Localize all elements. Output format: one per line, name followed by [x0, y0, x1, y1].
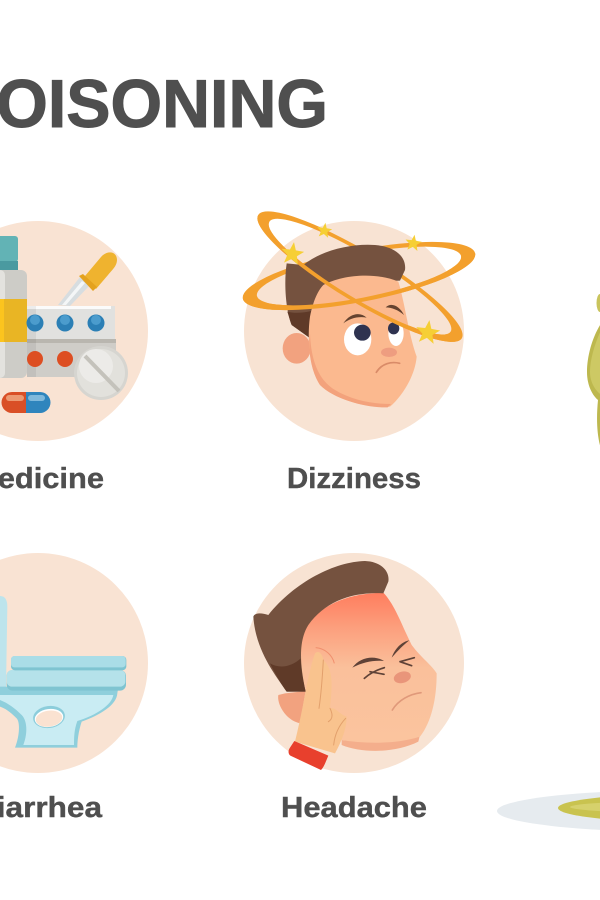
icon: round tablet — [74, 346, 128, 400]
panel: headache — [244, 553, 464, 824]
icon: toilet — [0, 595, 126, 748]
diarrhea background circle — [0, 553, 148, 773]
panel: medicine — [0, 221, 148, 495]
icon: capsule — [2, 392, 50, 413]
icon: dropper — [58, 252, 117, 306]
icon: dizzy head — [242, 211, 476, 408]
headache background circle — [244, 553, 464, 773]
label: dizziness: Dizziness — [287, 463, 421, 495]
panel: diarrhea — [0, 553, 148, 824]
icon: falling vomit — [587, 294, 600, 452]
icon: head with headache — [253, 561, 437, 770]
medicine background circle — [0, 221, 148, 441]
label: headache: Headache — [281, 792, 427, 824]
icon: vomit puddle — [497, 790, 600, 832]
icon: medicine bottle — [0, 236, 27, 378]
dizziness background circle — [244, 221, 464, 441]
icon: blister pack — [26, 306, 116, 377]
panel: dizziness — [242, 211, 476, 488]
